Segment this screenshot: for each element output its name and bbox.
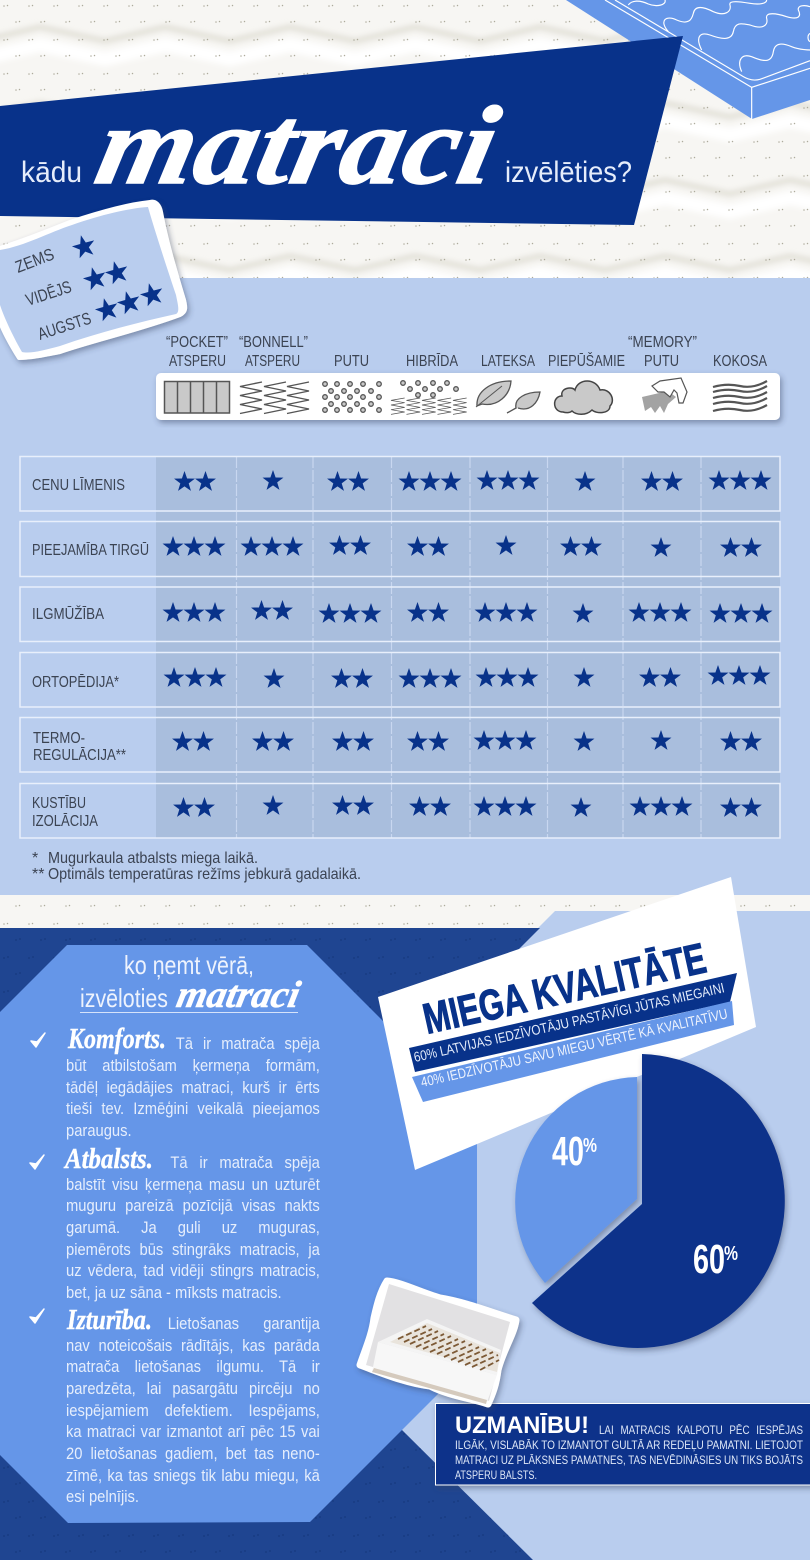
icon: hybrid [391,381,467,414]
row: market availability: PIEEJAMĪBA TIRGŪ [32,542,149,559]
row: thermoregulation: TERMO- [33,730,85,747]
icon: pocket springs [164,382,230,413]
banner: title ribbon [0,36,683,225]
text block: support: Tā ir matrača spēja [170,1154,320,1172]
text block: comfort: tieši tev. Izmēģini veikalā pieejamos [66,1100,320,1118]
icon: coconut fibre [713,381,767,411]
text block: support: bet, ja uz sāna - mīksts matracis. [66,1284,282,1302]
heading: advice: ko ņemt vērā, [124,950,254,980]
ribbon: 40 percent: 40% IEDZĪVOTĀJU SAVU MIEGU VĒRTĒ KĀ KVALITATĪVU [419,1005,729,1090]
row: price level [20,456,780,511]
title: script word matraci: matraci [87,84,509,208]
footnotes: Optimāls temperatūras režīms jebkurā gadalaikā. [48,866,361,883]
legend: low [13,232,98,277]
row: motion isolation: IZOLĀCIJA [32,813,99,830]
text block: support: uz vēdera, tad vidēji stingrs matracis, [66,1262,320,1280]
background: dark blue shape [0,928,540,1560]
text block: comfort: paraugus. [66,1122,132,1140]
bullet heading: support: Atbalsts. [63,1143,153,1175]
row: orthopaedics: ORTOPĒDIJA* [32,674,119,691]
text block: support [66,1154,320,1302]
panel: rating legend [0,202,185,358]
row: durability: ILGMŪŽĪBA [32,606,105,623]
panel: ratings table [20,456,780,838]
legend: low: ZEMS [13,245,57,277]
icon: foam [323,382,381,412]
icon: check 2 [30,1155,44,1169]
pie chart [515,1054,785,1348]
pie slice: 40 percent [515,1077,637,1283]
text block: durability: zīmē, ka tas sniegs tik labu miegu, kā [66,1467,320,1485]
title: question word: izvēlēties? [505,156,632,189]
heading: advice [80,950,304,1016]
heading: advice: matraci [173,974,304,1016]
callout: warning [436,1404,810,1485]
column headings [166,334,767,370]
footnotes: ** [32,866,44,883]
row: motion isolation [20,784,780,838]
icon: air cloud [555,381,612,414]
title: small lead word: kādu [21,156,82,189]
row: motion isolation: KUSTĪBU [32,795,86,812]
text block: support: balstīt visu ķermeņa masu un uzturēt [66,1176,320,1194]
text block: comfort: tādēļ iegādājies matraci, kurš ir ērts [66,1079,320,1097]
icon: check 1 [31,1033,45,1047]
icon: bonnell springs [240,382,309,414]
text block: durability: esi pelnījis. [66,1488,139,1506]
icon: check 3 [30,1309,44,1323]
background: mattress texture strip [0,895,810,928]
text block: durability: paredzēta, lai pasargātu pircēju no [66,1380,320,1398]
row: thermoregulation: REGULĀCIJA** [33,747,126,764]
callout: warning: UZMANĪBU! [455,1412,589,1439]
column headings: KOKOSA [713,353,767,370]
text block: comfort: būt atbilstošam ķermeņa formām, [66,1057,320,1075]
icon: blue mattress corner [566,0,810,119]
pie slice: 60 percent: % [724,1243,738,1265]
text block: durability: nav noteicošais rādītājs, kas parāda [66,1337,320,1355]
pie slice: 40 percent: 40 [552,1128,584,1174]
legend: high [35,280,166,344]
column headings: PUTU [334,353,369,370]
text block: support: piemērots būs stingrāks matracis, ja [66,1241,320,1259]
table shading [156,456,780,838]
legend: medium [23,258,131,310]
row: thermoregulation [20,718,780,772]
row: durability [20,587,780,642]
panel: mattress type icon bar [156,373,780,420]
photo: slatted bed frame [360,1281,516,1404]
bullet heading: durability: Izturība. [66,1304,152,1336]
heading: advice: izvēloties [80,983,168,1013]
panel: advice octagon [0,945,477,1523]
bullet heading: comfort: Komforts. [67,1023,166,1055]
column headings: ATSPERU [169,353,226,370]
card title: MIEGA KVALITĀTE [419,935,710,1044]
legend: medium: VIDĒJS [23,277,74,310]
text block: durability: matrača lietošanas ilgumu. Tā ir [66,1358,320,1376]
card: sleep quality [378,877,756,1170]
footnotes: * [32,850,38,867]
text block: durability [66,1315,320,1506]
row: orthopaedics [20,652,780,707]
ribbon: 40 percent [412,1001,734,1102]
text block: support: garumā. Ja guli uz muguras, [66,1219,320,1237]
footnotes: Mugurkaula atbalsts miega laikā. [48,850,258,867]
legend: high: AUGSTS [35,309,94,344]
text block: durability: 20 lietošanas gadiem, bet tas neno- [66,1445,320,1463]
column headings: PUTU [644,353,679,370]
pie slice: 60 percent [532,1054,785,1348]
text block: durability: ka matraci var izmantot arī pēc 15 vai [66,1423,320,1441]
icon: latex leaves [476,381,540,413]
column headings: HIBRĪDA [406,352,458,370]
column headings: PIEPŪŠAMIE [548,351,625,370]
callout: warning: ATSPERU BALSTS. [455,1468,537,1482]
ribbon: 60 percent: 60% LATVIJAS IEDZĪVOTĀJU PASTĀVĪGI JŪTAS MIEGAINI [412,979,726,1065]
row: market availability [20,522,780,576]
background: mattress texture top [0,0,810,288]
icon: memory foam hand [642,378,687,413]
row: price level: CENU LĪMENIS [32,477,125,494]
pie slice: 60 percent: 60 [693,1236,725,1282]
column headings: ATSPERU [245,353,300,370]
column headings: “BONNELL” [239,334,308,351]
column headings: “POCKET” [166,334,228,351]
text block: durability: iespējamiem defektiem. Iespējams, [66,1402,320,1420]
column headings: “MEMORY” [628,334,697,351]
pie slice: 40 percent: % [583,1135,597,1157]
footnotes [32,850,361,883]
text block: comfort: Tā ir matrača spēja [176,1035,320,1053]
text block: durability: Lietošanas garantija [168,1315,320,1333]
text block: support: muguru pareizā pozīcijā visas nakts [66,1197,320,1215]
text block: comfort [66,1035,320,1140]
column headings: LATEKSA [481,353,535,370]
